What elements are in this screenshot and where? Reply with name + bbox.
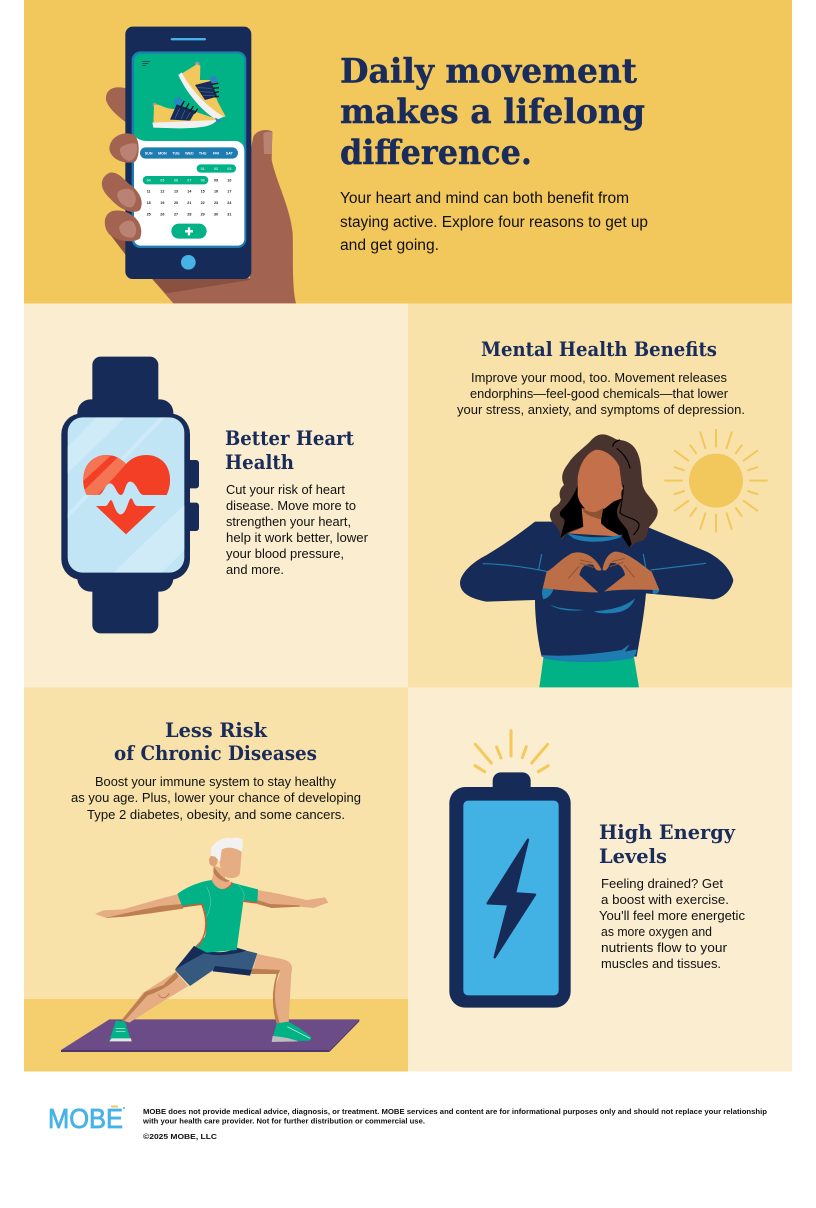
intro text: Your heart and mind can both benefit from [340,190,629,207]
head [209,838,243,889]
body text [71,774,361,822]
title [340,52,645,172]
body text: strengthen your heart, [226,514,351,529]
body text [599,876,745,971]
shorts [175,946,257,986]
panel: mental health benefits [408,304,792,688]
calendar: 15 [201,190,205,194]
calendar: 07 [187,178,191,182]
title: difference. [340,133,532,172]
arms [95,890,328,918]
phone body [125,27,251,279]
calendar: 13 [174,190,178,194]
head and hands [542,434,659,599]
icon: hand [106,87,296,303]
heading: of Chronic Diseases [114,742,317,765]
calendar: 28 [187,212,191,216]
body text: Cut your risk of heart [226,482,345,497]
calendar: 22 [201,201,205,205]
body text: endorphins—feel-good chemicals—that lower [470,386,729,401]
calendar [140,147,238,239]
calendar: 03 [227,167,231,171]
calendar: 21 [187,201,191,205]
heading: Mental Health Benefits [481,338,717,361]
calendar: 27 [174,212,178,216]
body text [457,370,745,417]
heading: High Energy [599,821,736,844]
intro text: staying active. Explore four reasons to get up [340,214,648,231]
panel: better heart health [24,304,408,688]
heading [225,427,354,474]
body text: your stress, anxiety, and symptoms of depression. [457,402,745,417]
calendar: 14 [187,190,192,194]
calendar: FRI [213,152,219,156]
calendar: 25 [147,212,151,216]
calendar: 09 [214,178,218,182]
phone screen [132,51,246,248]
body text: your blood pressure, [226,546,344,561]
heading [114,719,317,765]
body text: Boost your immune system to stay healthy [95,774,336,789]
title: Daily movement [340,52,638,90]
body text: You'll feel more energetic [599,908,745,923]
heading: Health [225,451,294,474]
heart hands [542,552,659,599]
calendar: 02 [214,167,218,171]
yoga mat [61,1019,359,1052]
calendar: 12 [160,190,164,194]
panel: less risk of chronic diseases [24,688,408,1072]
footer disclaimer [142,1107,767,1141]
calendar: TUE [172,152,180,156]
body text: Type 2 diabetes, obesity, and some cancers. [87,807,345,822]
calendar: 31 [227,212,231,216]
body text: nutrients flow to your [601,940,728,955]
calendar: SAT [226,152,234,156]
body text: as you age. Plus, lower your chance of developing [71,790,361,805]
calendar: WED [185,152,194,156]
calendar: 04 [147,178,152,182]
neckline [567,533,623,542]
calendar: 05 [160,178,164,182]
body text: and more. [226,562,284,577]
icon: smartwatch with heart [61,357,199,633]
hair [550,434,658,548]
body text: a boost with exercise. [601,892,729,907]
calendar: 29 [201,212,205,216]
calendar: 26 [160,212,164,216]
calendar: 06 [174,178,178,182]
heading: Less Risk [165,719,267,742]
body text: Improve your mood, too. Movement releases [471,370,727,385]
heading: Better Heart [225,427,354,450]
calendar: MON [158,152,167,156]
shoes [109,1021,312,1042]
heading [599,821,736,868]
body text: help it work better, lower [226,530,369,545]
shirt [177,879,258,953]
illustration: woman making heart hands [460,429,768,687]
calendar: 20 [174,201,178,205]
footer disclaimer: MOBE does not provide medical advice, diagnosis, or treatment. MOBE services and content are for informational purposes only and should not replace your relationship [143,1107,767,1116]
logo: MOBE: MOBE [48,1103,123,1134]
calendar: SUN [145,152,153,156]
calendar: 10 [227,178,231,182]
body text: Feeling drained? Get [601,876,723,891]
calendar: 19 [160,201,164,205]
illustration: man in yoga lunge on mat [61,838,359,1052]
body text: muscles and tissues. [601,956,721,971]
calendar: 24 [227,201,232,205]
icon: battery with lightning bolt [449,731,571,1008]
calendar: THU [199,152,207,156]
footer disclaimer: with your health care provider. Not for further distribution or commercial use. [142,1116,425,1126]
calendar: 08 [201,178,205,182]
neck [568,508,622,537]
body text: as more oxygen and [601,924,712,939]
calendar: 23 [214,201,218,205]
panel: high energy levels [408,688,792,1072]
body text: disease. Move more to [226,498,356,513]
calendar: 17 [227,190,231,194]
panel: header [24,0,792,304]
illustration: hand holding phone [102,27,296,303]
body text [226,482,369,577]
icon: fingers [102,133,142,241]
face [578,450,623,513]
calendar: 11 [147,190,151,194]
calendar: 18 [147,201,151,205]
intro text [340,190,648,254]
calendar: 16 [214,190,218,194]
legs [122,954,292,1024]
title: makes a lifelong [340,92,645,131]
calendar: 30 [214,212,218,216]
icon: sun [664,429,768,532]
calendar: 01 [201,167,205,171]
intro text: and get going. [340,237,439,254]
heading: Levels [599,845,667,868]
footer disclaimer: ©2025 MOBE, LLC [143,1132,218,1141]
icon: sneakers [152,62,226,128]
